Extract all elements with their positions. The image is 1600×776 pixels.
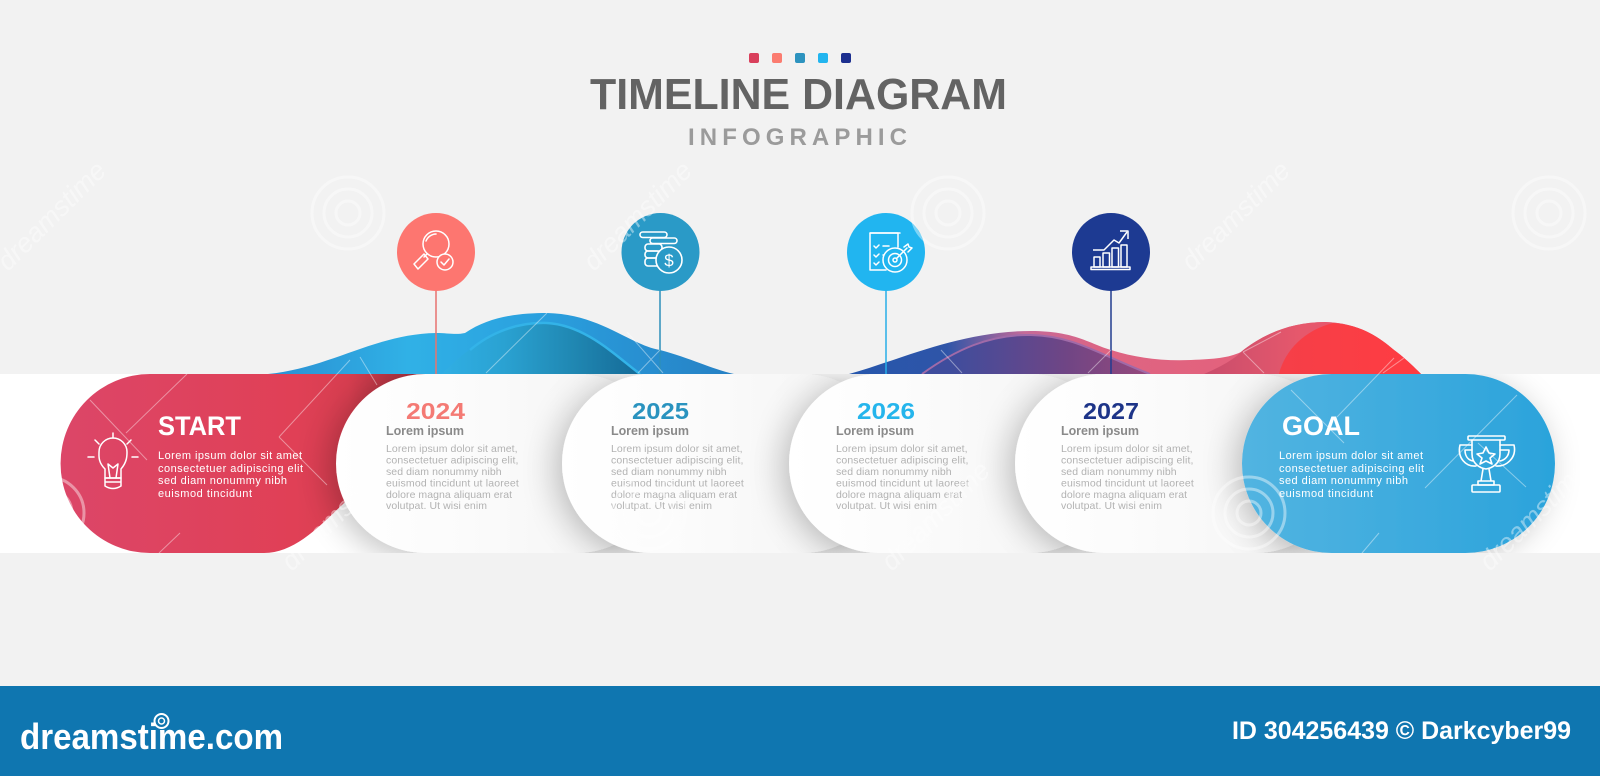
icon: checklist target badge: [847, 213, 925, 291]
icon: coins badge: $: [664, 251, 674, 270]
watermark: dreamstime: [1473, 455, 1594, 576]
heading: goal: GOAL: [1282, 411, 1360, 441]
text: 2027 description: euismod tincidunt ut laoreet: [1061, 478, 1194, 490]
watermark: dreamstime: [275, 455, 396, 576]
subheading: 2026: Lorem ipsum: [836, 424, 914, 438]
text: start description: consectetuer adipiscing elit: [158, 463, 303, 475]
subheading: 2025: Lorem ipsum: [611, 424, 689, 438]
text: 2027 description: sed diam nonummy nibh: [1061, 466, 1177, 478]
text: goal description: Lorem ipsum dolor sit amet: [1279, 450, 1423, 462]
text: 2027 description: [1061, 443, 1194, 512]
text: 2025 description: [611, 443, 744, 512]
text: 2024 description: Lorem ipsum dolor sit amet,: [386, 443, 518, 455]
colour dots: [749, 53, 851, 63]
text: 2027 description: dolore magna aliquam erat: [1061, 489, 1187, 501]
text: 2027 description: volutpat. Ut wisi enim: [1061, 500, 1162, 512]
text: start description: Lorem ipsum dolor sit amet: [158, 450, 302, 462]
wave: blue: [268, 313, 734, 374]
year: 2025: 2025: [632, 398, 689, 424]
text: start description: [158, 450, 303, 500]
2024 content: [386, 398, 519, 512]
white band: [0, 374, 1600, 553]
icon: light bulb: [88, 433, 138, 488]
text: 2026 description: consectetuer adipiscing elit,: [836, 454, 968, 466]
watermark: dreamstime: [875, 455, 996, 576]
panel: goal: [1242, 374, 1555, 553]
icon: coins badge: [622, 213, 700, 291]
subheading: 2027: Lorem ipsum: [1061, 424, 1139, 438]
watermark: dreamstime: [1175, 155, 1296, 276]
panel: 2024: [336, 374, 666, 553]
text: goal description: [1279, 450, 1424, 500]
text: 2024 description: sed diam nonummy nibh: [386, 466, 502, 478]
2025 content: [611, 398, 744, 512]
text: 2026 description: [836, 443, 969, 512]
text: goal description: euismod tincidunt: [1279, 488, 1373, 500]
text: 2025 description: consectetuer adipiscing elit,: [611, 454, 743, 466]
panel: 2026: [789, 374, 1119, 553]
text: 2026 description: euismod tincidunt ut laoreet: [836, 478, 969, 490]
text: start description: euismod tincidunt: [158, 488, 252, 500]
wave: purple to red: [849, 322, 1421, 374]
text: 2026 description: Lorem ipsum dolor sit amet,: [836, 443, 968, 455]
text: 2026 description: dolore magna aliquam erat: [836, 489, 962, 501]
subtitle: INFOGRAPHIC: [688, 124, 907, 151]
text: 2027 description: Lorem ipsum dolor sit amet,: [1061, 443, 1193, 455]
watermark: [0, 155, 1594, 576]
text: 2025 description: dolore magna aliquam erat: [611, 489, 737, 501]
connector: 2024: [435, 290, 437, 374]
text: 2025 description: sed diam nonummy nibh: [611, 466, 727, 478]
title: TIMELINE DIAGRAM: [590, 70, 1007, 119]
2026 content: [836, 398, 969, 512]
year: 2024: 2024: [406, 398, 465, 424]
watermark: dreamstime: [577, 155, 698, 276]
icon: magnifier badge: [397, 213, 475, 291]
text: goal description: consectetuer adipiscing elit: [1279, 463, 1424, 475]
year: 2027: 2027: [1083, 398, 1139, 424]
2027 content: [1061, 398, 1194, 512]
icon: growth chart badge: [1072, 213, 1150, 291]
text: 2024 description: consectetuer adipiscing elit,: [386, 454, 518, 466]
panel: start: [61, 374, 440, 553]
connector: 2026: [885, 290, 887, 374]
year: 2026: 2026: [857, 398, 915, 424]
heading: start: START: [158, 411, 241, 441]
start content: [88, 411, 303, 500]
text: 2025 description: volutpat. Ut wisi enim: [611, 500, 712, 512]
text: 2025 description: euismod tincidunt ut laoreet: [611, 478, 744, 490]
timeline pills: [61, 374, 1555, 553]
connector: 2025: [659, 290, 661, 374]
footer credit: ID 304256439 © Darkcyber99: [1232, 717, 1571, 745]
text: 2024 description: dolore magna aliquam erat: [386, 489, 512, 501]
goal content: [1279, 411, 1515, 500]
text: 2026 description: sed diam nonummy nibh: [836, 466, 952, 478]
icon: trophy: [1459, 436, 1515, 492]
text: 2024 description: euismod tincidunt ut laoreet: [386, 478, 519, 490]
text: 2027 description: consectetuer adipiscing elit,: [1061, 454, 1193, 466]
text: start description: sed diam nonummy nibh: [158, 475, 287, 487]
footer logo: dreamstime.com: [20, 716, 283, 757]
panel: 2027: [1015, 374, 1345, 553]
text: goal description: sed diam nonummy nibh: [1279, 475, 1408, 487]
text: 2024 description: [386, 443, 519, 512]
text: 2026 description: volutpat. Ut wisi enim: [836, 500, 937, 512]
footer bar: [0, 686, 1600, 776]
subheading: 2024: Lorem ipsum: [386, 424, 464, 438]
panel: 2025: [562, 374, 892, 553]
text: 2025 description: Lorem ipsum dolor sit amet,: [611, 443, 743, 455]
text: 2024 description: volutpat. Ut wisi enim: [386, 500, 487, 512]
connector: 2027: [1110, 290, 1112, 374]
